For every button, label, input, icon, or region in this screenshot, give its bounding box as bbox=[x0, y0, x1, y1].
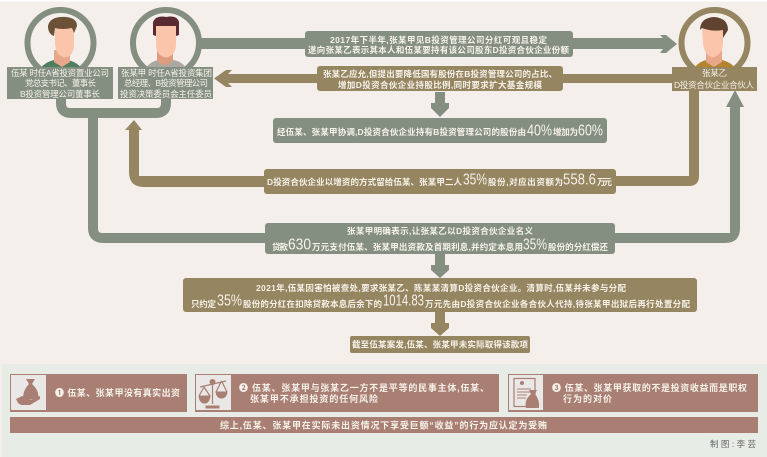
label: Zhang Yi bbox=[672, 67, 757, 91]
label: Wu: 伍某 时任A省投资置业公司 bbox=[11, 68, 109, 78]
label: Zhang Jia: 张某甲 时任A省投资集团 bbox=[121, 68, 212, 78]
box: negotiated share increase: 40% bbox=[527, 122, 552, 140]
box: negotiated share increase bbox=[273, 118, 607, 143]
panel: conclusions background bbox=[2, 364, 767, 457]
box: negotiated share increase: 60% bbox=[578, 122, 603, 140]
label: Wu: 党总支书记、董事长 bbox=[25, 78, 96, 88]
label: Wu: B投资管理公司董事长 bbox=[20, 89, 100, 99]
arrow: green down arrow to negotiated result bbox=[431, 92, 449, 117]
box: 2021 liquidation: 只约定 bbox=[191, 299, 216, 309]
box: 2021 liquidation: 35% bbox=[217, 292, 242, 310]
icon: portrait of Wu bbox=[28, 10, 94, 80]
box: negotiated share increase: 增加为 bbox=[553, 127, 578, 137]
box: loan repayment: 贷款 bbox=[272, 242, 288, 252]
box: money not obtained: 截至伍某案发,伍某、张某甲未实际取得该款项 bbox=[352, 340, 528, 350]
box: capital increase: 股份,对应出资额为 bbox=[488, 177, 563, 187]
box: capital increase bbox=[264, 169, 616, 194]
box: 2017 approach: 遂向张某乙表示其本人和伍某要持有该公司股东D投资合伙企业份额 bbox=[308, 45, 569, 55]
box: loan repayment: 股份的分红偿还 bbox=[548, 242, 608, 252]
arrow: green connector from officials to repayment box bbox=[61, 99, 266, 238]
panel: conclusion three: 行为的对价 bbox=[563, 393, 612, 404]
box: loan repayment: 万元支付伍某、张某甲出资款及首期利息,并约定本息用 bbox=[312, 242, 523, 252]
box: 2017 approach bbox=[305, 31, 573, 57]
box: loan repayment: 35% bbox=[523, 236, 547, 254]
arrow: green arrow to partner bbox=[200, 35, 677, 53]
icon: portrait of Zhang Jia bbox=[133, 10, 199, 80]
box: 2021 liquidation: 1014.83 bbox=[383, 292, 424, 310]
box: 2021 liquidation: 2021年,伍某因害怕被查处,要求张某乙、陈某某清算D投资合伙企业。清算时,伍某并未参与分配 bbox=[256, 283, 626, 293]
arrow: tan arrow from capital increase to Zhang bbox=[125, 91, 699, 187]
box: 2021 liquidation: 股份的分红在扣除贷款本息后余下的 bbox=[243, 299, 382, 309]
credit: 制图:李芸 bbox=[710, 439, 756, 449]
label: Zhang Yi: 张某乙 bbox=[702, 68, 727, 78]
box: 2021 liquidation: 万元先由D投资合伙企业各合伙人代持,待张某甲出狱后再行处置分配 bbox=[425, 299, 690, 309]
panel: conclusion two: ❷ 伍某、张某甲与张某乙一方不是平等的民事主体,伍某、 bbox=[239, 382, 489, 393]
arrow: tan down arrow to final box bbox=[431, 312, 449, 336]
box: loan repayment bbox=[265, 223, 615, 254]
label: Zhang Jia: 投资决策委员会主任委员 bbox=[120, 89, 212, 99]
box: capital increase: 558.6 bbox=[563, 172, 596, 188]
panel: conclusion two: 张某甲不承担投资的任何风险 bbox=[250, 393, 378, 404]
panel: conclusion one bbox=[10, 374, 187, 412]
label: Zhang Jia bbox=[118, 67, 213, 99]
box: Zhang Yi agrees: 增加D投资合伙企业持股比例,同时要求扩大基金规模 bbox=[338, 80, 542, 90]
icon: scales bbox=[199, 380, 227, 408]
panel: conclusion three bbox=[508, 374, 758, 412]
box: capital increase: 35% bbox=[463, 172, 487, 188]
arrow: green down arrow to 2021 box bbox=[431, 252, 449, 278]
banner: overall conclusion: 综上,伍某、张某甲在实际未出资情况下享受巨额“收益”的行为应认定为受贿 bbox=[220, 420, 547, 430]
arrow: tan arrow back to Zhang Jia bbox=[214, 70, 680, 87]
label: Zhang Jia: 总经理、B投资管理公司 bbox=[124, 78, 208, 88]
box: loan repayment: 张某甲明确表示,让张某乙以D投资合伙企业名义 bbox=[347, 226, 533, 236]
panel: conclusion one: ❶ 伍某、张某甲没有真实出资 bbox=[55, 387, 180, 398]
box: negotiated share increase: 经伍某、张某甲协调,D投资合伙企业持有B投资管理公司的股份由 bbox=[277, 127, 526, 137]
label: Zhang Yi: D投资合伙企业合伙人 bbox=[674, 80, 754, 90]
icon: certificate and money bag bbox=[514, 378, 539, 408]
panel: conclusion two bbox=[195, 374, 499, 412]
box: capital increase: 万元 bbox=[597, 177, 612, 187]
box: Zhang Yi agrees: 张某乙应允,但提出要降低国有股份在B投资管理公司的占比、 bbox=[323, 69, 557, 79]
icon: portrait of Zhang Yi bbox=[682, 10, 748, 80]
banner: overall conclusion bbox=[10, 417, 758, 433]
box: capital increase: D投资合伙企业以增资的方式留给伍某、张某甲二人 bbox=[267, 177, 462, 187]
box: loan repayment: 630 bbox=[288, 236, 311, 254]
box: money not obtained bbox=[350, 336, 530, 353]
box: 2017 approach: 2017年下半年,张某甲见B投资管理公司分红可观且稳定 bbox=[330, 35, 547, 45]
arrow: green arrow from repayment box up to partner bbox=[600, 90, 744, 243]
box: Zhang Yi agrees bbox=[317, 66, 563, 91]
box: 2021 liquidation bbox=[183, 278, 697, 312]
label: Wu bbox=[7, 67, 113, 99]
panel: conclusion three: ❸ 伍某、张某甲获取的不是投资收益而是职权 bbox=[552, 382, 747, 393]
icon: money bag in hand bbox=[16, 379, 40, 405]
